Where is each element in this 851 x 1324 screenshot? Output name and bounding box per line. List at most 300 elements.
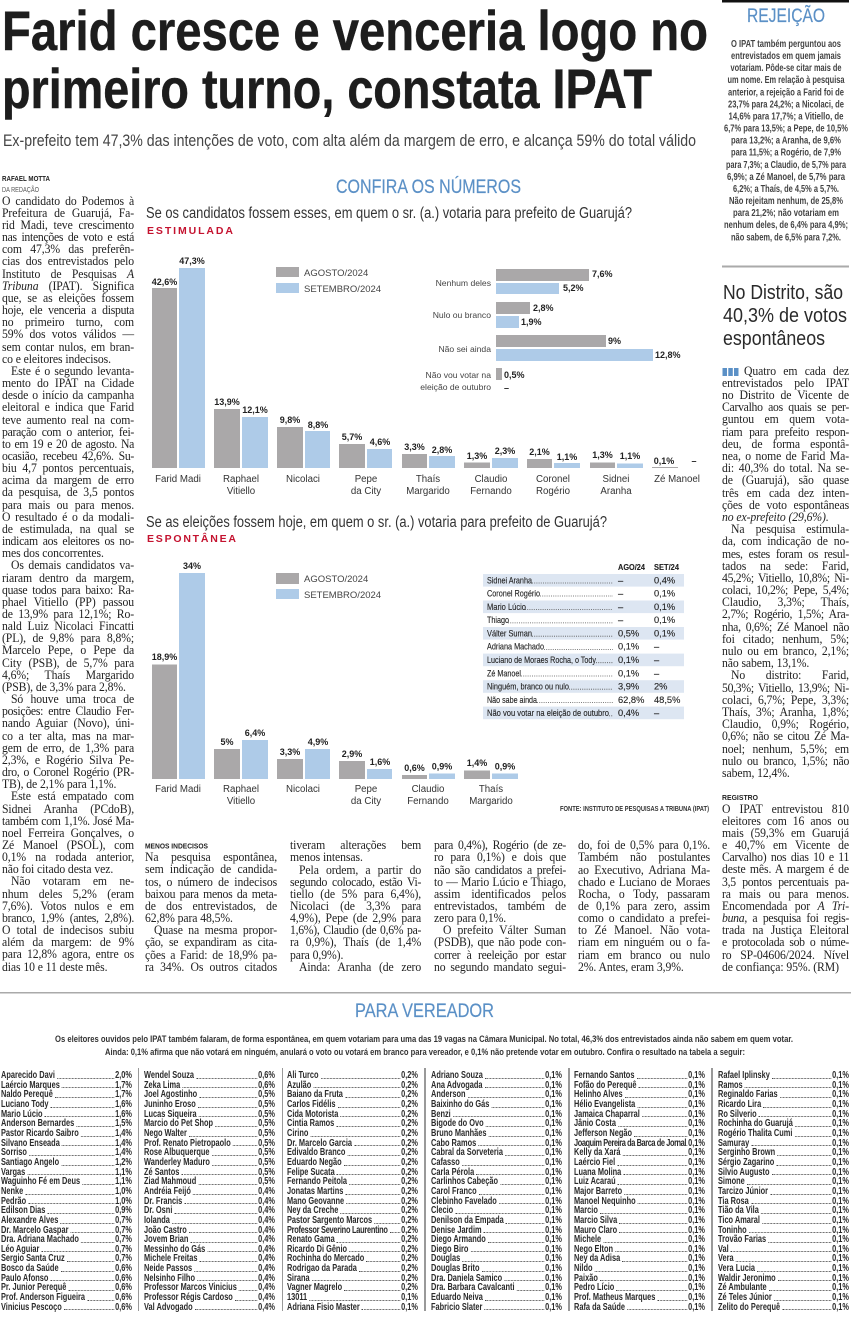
article: menos indecisos, column 1: ções a Farid: de 18,9% pa- [145, 948, 277, 962]
article: registro: de confiança: 95%. (RM) [722, 960, 839, 974]
list: vereadores, column 2: Marcio do Pet Shop [144, 1118, 213, 1129]
list: vereadores, column 3: Cida Motorista [287, 1109, 338, 1120]
question: espontânea: ESPONTÂNEA [147, 532, 236, 545]
table: outros citados: 2% [654, 682, 667, 692]
legend: espontânea [276, 573, 381, 601]
list: vereadores, column 1: 0,7% [115, 1253, 132, 1264]
table: outros citados: 0,1% [654, 589, 675, 599]
list: vereadores, column 3: 0,2% [401, 1089, 418, 1100]
list: vereadores, column 1: Alexandre Alves [1, 1215, 58, 1226]
list: vereadores, column 2: Prof. Renato Pietropaolo [144, 1138, 231, 1149]
article: menos indecisos, column 3: correr à reeleição por estar [434, 948, 566, 962]
icon: blue bars [722, 368, 738, 376]
table: outros citados: – [654, 655, 660, 665]
bar chart: nenhum, nulo, não sei: 7,6% [592, 269, 613, 279]
headline: primeiro turno, constata IPAT [2, 57, 652, 120]
list: vereadores, column 3: 0,2% [401, 1224, 418, 1236]
article: registro: Carvalho) nos dias 10 e 11 [722, 850, 849, 864]
list: vereadores, column 5: Prof. Matheus Marques [574, 1292, 655, 1303]
article: menos indecisos, column 3: O prefeito Válter Suman [443, 923, 566, 937]
article: menos indecisos, column 4: do, foi de 0,5% para 0,1%. [578, 838, 710, 852]
bar chart: nenhum, nulo, não sei: 9% [608, 336, 621, 346]
list: vereadores, column 4: 0,1% [545, 1234, 562, 1245]
bar chart: nenhum, nulo, não sei: 0,5% [504, 370, 525, 380]
bar chart: espontânea: Raphael [223, 784, 259, 795]
list: vereadores, column 5: 0,1% [688, 1234, 705, 1245]
list: vereadores, column 6: Vera Lucia [718, 1263, 755, 1274]
list: vereadores, column 2: Ziad Mahmoud [144, 1176, 196, 1187]
article: registro: deste mês. A margem é de [722, 862, 849, 876]
table: outros citados: – [618, 602, 624, 612]
list: vereadores, column 3: 0,2% [401, 1186, 418, 1197]
bar chart: estimulada: Vitiello [227, 486, 255, 497]
article: main text column: hoje, ele venceria a disputa [2, 303, 134, 317]
list: vereadores, column 6: Rogério Thalita Cumi [718, 1128, 792, 1139]
list: vereadores, column 4: Cafasso [431, 1157, 460, 1168]
article: menos indecisos, column 4: riam em branco ou nulo [578, 948, 710, 962]
list: vereadores, column 6: Samuray [718, 1138, 749, 1149]
list: vereadores, column 6: 0,1% [832, 1292, 849, 1303]
article: menos indecisos, column 2: segundo colocado, estão Vi- [290, 875, 421, 889]
article: main text column: 4,6%; Thaís Margarido [2, 668, 134, 682]
list: vereadores, column 4: Denilson da Empada [431, 1215, 504, 1226]
article: menos indecisos, column 3: não são candidatos a prefei- [434, 862, 566, 876]
list: vereadores, column 3: Ney da Creche [287, 1205, 338, 1216]
list: vereadores, column 2: 0,4% [258, 1302, 275, 1313]
list: vereadores, column 6: Toninho [718, 1224, 747, 1236]
list: vereadores, column 5: 0,1% [688, 1138, 705, 1149]
list: vereadores, column 2: Val Advogado [144, 1302, 193, 1313]
list: vereadores, column 1: Pedrão [1, 1196, 26, 1207]
list: vereadores, column 5: Luiz Acaraú [574, 1176, 616, 1187]
list: vereadores, column 5: Helinho Alves [574, 1089, 623, 1100]
list: vereadores, column 6: Simone [718, 1176, 745, 1187]
list: vereadores, column 5: 0,1% [688, 1215, 705, 1226]
bar chart: estimulada: Rogério [536, 486, 570, 497]
article: registro: e 40,7% em Vicente de [722, 838, 849, 852]
list: vereadores, column 5: 0,1% [688, 1253, 705, 1264]
article: menos indecisos, column 3: to — Mario Lúcio e Thiago, [434, 875, 566, 889]
list: vereadores, column 1: 1,1% [115, 1176, 132, 1187]
list: vereadores, column 5: Ney da Adisa [574, 1253, 620, 1264]
list: vereadores, column 5: Marcio Silva [574, 1215, 617, 1226]
article: registro: 3,5 pontos percentuais pa- [722, 875, 849, 889]
list: vereadores, column 1: 1,1% [115, 1167, 132, 1178]
article: main text column: desde o início da campanha [2, 388, 134, 402]
article: main text column: Só houve uma troca de [11, 692, 134, 706]
list: vereadores, column 2: 0,5% [258, 1089, 275, 1100]
article: main text column: (PSB), de 3,3% para 2,8%. [2, 680, 126, 694]
list: vereadores, column 3: 0,2% [401, 1118, 418, 1129]
list: vereadores, column 6: Rafael Iplinsky [718, 1070, 770, 1081]
list: vereadores, column 5: Nego Elton [574, 1244, 613, 1255]
list: vereadores, column 4: 0,1% [545, 1128, 562, 1139]
bar chart: espontânea: 0,9% [495, 762, 515, 772]
article: distrito text column: no Distrito de Vicente de [722, 388, 849, 402]
list: vereadores, column 1: Prof. Anderson Figueira [1, 1292, 85, 1303]
list: vereadores, column 4: 0,1% [545, 1215, 562, 1226]
list: vereadores, column 6: Tarcizo Júnior [718, 1186, 768, 1197]
bar chart: espontânea: Pepe [355, 784, 377, 795]
list: vereadores, column 3 [287, 1070, 418, 1313]
list: vereadores, column 1: 0,7% [115, 1224, 132, 1236]
list: vereadores, column 2: Wendel Souza [144, 1070, 194, 1081]
source note: FONTE: INSTITUTO DE PESQUISAS A TRIBUNA (IPAT) [560, 806, 709, 813]
list: vereadores, column 6: 0,1% [832, 1128, 849, 1139]
list: vereadores, column 1: 0,6% [115, 1273, 132, 1284]
article: menos indecisos, column 2: tiello (de 5% para 6,4%), [290, 887, 421, 901]
article: main text column: quase todos para baixo: Ra- [2, 583, 134, 597]
list: vereadores, column 1: 0,6% [115, 1302, 132, 1313]
bar chart: estimulada: Pepe [355, 474, 377, 485]
list: vereadores, column 3: Baiano da Fruta [287, 1089, 343, 1100]
article: menos indecisos, column 4: ao Executivo, Adriana Ma- [578, 862, 710, 876]
bar chart: estimulada: 47,3% [179, 256, 205, 266]
heading: confira os números: CONFIRA OS NÚMEROS [336, 175, 521, 198]
article: main text column: eleitoral e indica que Farid [2, 400, 134, 414]
article: distrito text column [722, 364, 849, 780]
list: vereadores, column 6: 0,1% [832, 1157, 849, 1168]
list: vereadores, column 1: Léo Aguiar [1, 1244, 39, 1255]
label: registro: REGISTRO [722, 793, 758, 802]
bar chart: estimulada: 12,1% [242, 405, 268, 415]
article: menos indecisos, column 3: ro para 0,1%) e dois que [434, 850, 566, 864]
table: outros citados: Não vou votar na eleição de outubro [487, 708, 609, 718]
bar chart: estimulada: Claudio [475, 474, 507, 485]
list: vereadores, column 5: Joaquim Pereira da Barca de Jornal [574, 1138, 686, 1149]
list: vereadores, column 3: Adriana Fisio Master [287, 1302, 360, 1313]
list: vereadores, column 1: 1,5% [115, 1118, 132, 1129]
list: vereadores, column 1: 1,2% [115, 1157, 132, 1168]
list: vereadores, column 5: Manoel Nequinho [574, 1196, 636, 1207]
list: vereadores, column 3: 0,2% [401, 1070, 418, 1081]
list: vereadores, column 1: 1,6% [115, 1099, 132, 1110]
bar chart: espontânea: Farid Madi [155, 784, 201, 795]
list: vereadores, column 2: 0,4% [258, 1253, 275, 1264]
bar chart: espontânea: Fernando [407, 796, 449, 807]
list: vereadores, column 3: Fernando Peitola [287, 1176, 347, 1187]
list: vereadores, column 5: 0,1% [688, 1147, 705, 1158]
list: vereadores, column 6: 0,1% [832, 1273, 849, 1284]
article: registro: e protocolada sob o núme- [722, 935, 849, 949]
list: vereadores, column 4: Benzi [431, 1109, 451, 1120]
list: vereadores, column 4: Douglas [431, 1253, 460, 1264]
list: vereadores, column 3: 0,2% [401, 1080, 418, 1091]
bar chart: espontânea: Thaís [479, 784, 503, 795]
table: outros citados: 0,4% [654, 575, 675, 585]
list: vereadores, column 2: 0,4% [258, 1263, 275, 1274]
bar chart: espontânea: 0,6% [404, 763, 425, 773]
list: vereadores, column 6: 0,1% [832, 1253, 849, 1264]
bar chart: estimulada: 1,1% [557, 452, 577, 462]
list: vereadores, column 1: Silvano Enseada [1, 1138, 60, 1149]
byline: RAFAEL MOTTA [2, 174, 50, 183]
article: distrito text column: foi citado; nenhum, 5%; [722, 632, 849, 646]
list: vereadores, column 3: 0,2% [401, 1253, 418, 1264]
bar chart: estimulada: 42,6% [152, 277, 177, 287]
bar chart: espontânea [152, 561, 518, 807]
article: main text column: co a ter alta, mas na mar- [2, 729, 134, 743]
list: vereadores, column 1: Santiago Angelo [1, 1157, 59, 1168]
list: vereadores, column 3: Eduardo Negão [287, 1157, 342, 1168]
bar chart: estimulada: – [691, 456, 697, 466]
list: vereadores, column 2: Iolanda [144, 1215, 170, 1226]
list: vereadores, column 1: 1,6% [115, 1109, 132, 1120]
article: menos indecisos, column 4: chado e Luciano de Moraes [578, 875, 710, 889]
list: vereadores, column 6: Zelito do Perequê [718, 1302, 780, 1313]
list: vereadores, column 3: 0,2% [401, 1215, 418, 1226]
list: vereadores, column 1: 0,6% [115, 1282, 132, 1293]
article: distrito text column: ções de voto espontâneas [722, 498, 849, 512]
list: vereadores, column 5: Jânio Costa [574, 1118, 616, 1129]
bar chart: nenhum, nulo, não sei: 1,9% [521, 317, 542, 327]
table: outros citados: AGO/24 [618, 562, 645, 572]
list: vereadores, column 5: 0,1% [688, 1282, 705, 1293]
bar chart: nenhum, nulo, não sei: – [504, 383, 509, 393]
list: vereadores, column 6: 0,1% [832, 1302, 849, 1313]
bar chart: estimulada: 1,3% [467, 451, 487, 461]
list: vereadores, column 1: Aparecido Davi [1, 1070, 55, 1081]
list: vereadores, column 5: Fofão do Perequê [574, 1080, 636, 1091]
list: vereadores, column 5: Jamaica Chaparral [574, 1109, 640, 1120]
article: distrito text column: não sabem, 13,1%. [722, 656, 809, 670]
list: vereadores, column 2: Rose Albuquerque [144, 1147, 210, 1158]
list: vereadores, column 4: Diego Biro [431, 1244, 468, 1255]
list: vereadores, column 6: Vera [718, 1253, 734, 1264]
list: vereadores, column 3: 0,2% [401, 1147, 418, 1158]
article: menos indecisos, column 1: ra 34%. Os outros citados [145, 960, 277, 974]
list: vereadores, column 1 [1, 1070, 132, 1313]
bar chart: espontânea: Vitiello [227, 796, 255, 807]
article: main text column: TB), de 2,1% para 1,1%. [2, 777, 116, 791]
list: vereadores, column 4: Eduardo Neiva [431, 1292, 483, 1303]
table: outros citados: 48,5% [654, 695, 680, 705]
article: menos indecisos, column 3: zero para 0,1%. [434, 911, 506, 925]
list: vereadores, column 1: Dra. Adriana Machado [1, 1234, 79, 1245]
article: main text column: gem de erro, de 1,3% para [2, 741, 134, 755]
article: registro: buna, a pesquisa foi regis- [722, 911, 849, 925]
list: vereadores, column 6: Silvio Augusto [718, 1167, 770, 1178]
article: main text column: O resultado é o da modali- [2, 510, 134, 524]
article: main text column: cias dos entrevistados pelo [2, 254, 134, 268]
list: vereadores, column 6: Serginho Brown [718, 1147, 775, 1158]
list: vereadores, column 1: Sergio Santa Cruz [1, 1253, 65, 1264]
article: menos indecisos, column 3 [434, 838, 566, 974]
table: outros citados: – [618, 615, 624, 625]
article: distrito text column: riam para prefeito respon- [722, 425, 849, 439]
article: main text column: mento do IPAT na Cidade [2, 376, 134, 390]
article: main text column: to em 19 e 20 de agosto. Na [2, 437, 134, 451]
list: vereadores, column 1: Bosco da Saúde [1, 1263, 59, 1274]
list: vereadores, column 6: Ricardo Lira [718, 1099, 761, 1110]
list: vereadores, column 6: 0,1% [832, 1176, 849, 1187]
list: vereadores, column 2: Andréia Feijó [144, 1186, 191, 1197]
bar chart: espontânea: 0,9% [432, 762, 452, 772]
list: vereadores, column 1: 1,0% [115, 1186, 132, 1197]
article: main text column: no primeiro turno, com [2, 315, 134, 329]
list: vereadores, column 2: 0,4% [258, 1244, 275, 1255]
list: vereadores, column 3: 0,2% [401, 1234, 418, 1245]
article: menos indecisos, column 4: Rocha, o Tody, passaram [578, 887, 710, 901]
list: vereadores, column 4: Clecio [431, 1205, 453, 1216]
list: vereadores, column 2: 0,4% [258, 1215, 275, 1226]
article: main text column: dias 10 e 11 deste mês. [2, 960, 107, 974]
article: distrito text column: No distrito: Farid, [731, 668, 849, 682]
question: espontânea: Se as eleições fossem hoje, em quem o sr. (a.) votaria para prefeito de Guarujá? [146, 514, 607, 531]
list: vereadores, column 6: 0,1% [832, 1224, 849, 1236]
list: vereadores, column 4: Baixinho do Gás [431, 1099, 489, 1110]
list: vereadores, column 2: 0,4% [258, 1292, 275, 1303]
list: vereadores, column 4: Douglas Brito [431, 1263, 480, 1274]
bar chart: espontânea: 6,4% [245, 728, 265, 738]
article: distrito text column: 2,7%; Rogério, 1,5%; Ara- [722, 607, 849, 621]
article: main text column: co e eleitores indecisos. [2, 352, 111, 366]
list: vereadores, column 1: Luciano Tody [1, 1099, 49, 1110]
list: vereadores, column 2: 0,4% [258, 1234, 275, 1245]
list: vereadores, column 6: Waldir Jeronimo [718, 1273, 776, 1284]
article: menos indecisos, column 2: Pela ordem, a partir do [299, 862, 421, 876]
bar chart: estimulada: 4,6% [370, 437, 390, 447]
article: main text column: ocasião, recebeu 42,6%. Su- [2, 449, 134, 463]
list: vereadores, column 3: Jonatas Martins [287, 1186, 343, 1197]
article: menos indecisos, column 3: entrevistados, também de [434, 899, 566, 913]
list: vereadores, column 1: Anderson Bernardes [1, 1118, 74, 1129]
list: vereadores, column 6: Tião da Vila [718, 1205, 759, 1216]
bar chart: estimulada: 2,8% [432, 445, 452, 455]
list: vereadores, column 5: 0,1% [688, 1070, 705, 1081]
article: distrito text column: noel; nenhum, 5,5%; em [722, 742, 849, 756]
list: vereadores, column 1: 1,7% [115, 1089, 132, 1100]
list: vereadores, column 4: 0,1% [545, 1070, 562, 1081]
list: vereadores, column 5: Rafa da Saúde [574, 1302, 625, 1313]
list: vereadores, column 4: Carla Pérola [431, 1167, 474, 1178]
article: main text column: phael Vitiello (PP) passou [2, 595, 134, 609]
article: main text column: Zé Manoel (PSOL), com [2, 838, 134, 852]
list: vereadores, column 4: 0,1% [545, 1109, 562, 1120]
bar chart: estimulada: 13,9% [214, 397, 240, 407]
list: vereadores, column 4: Clebinho Favelado [431, 1196, 497, 1207]
list: vereadores, column 3: 0,1% [401, 1302, 418, 1313]
list: vereadores, column 4: Carlinhos Cabeção [431, 1176, 498, 1187]
list: vereadores, column 4: 0,1% [545, 1167, 562, 1178]
article: distrito text column: 50,3%; Vitiello, 13,9%; Ni- [722, 681, 849, 695]
list: vereadores, column 6: Ro Silverio [718, 1109, 757, 1120]
article: main text column: de estimulada, na qual se [2, 522, 134, 536]
article: menos indecisos, column 4: to Zé Manoel. Não vota- [578, 923, 710, 937]
legend: estimulada [276, 267, 381, 295]
list: vereadores, column 3: 0,2% [401, 1099, 418, 1110]
article: distrito text column: de (Guarujá), são quase [722, 473, 849, 487]
list: vereadores, column 4: Denise Jardim [431, 1224, 482, 1236]
table: outros citados: 0,1% [654, 602, 675, 612]
list: vereadores, column 4 [431, 1070, 562, 1313]
list: vereadores, column 5: Michele [574, 1234, 601, 1245]
list: vereadores, column 1: 0,7% [115, 1234, 132, 1245]
article: distrito text column: Quatro em cada dez [744, 364, 849, 378]
list: vereadores, column 4: Bigode do Ovo [431, 1118, 484, 1129]
list: vereadores, column 1: 1,7% [115, 1080, 132, 1091]
bar chart: estimulada: da City [351, 486, 381, 497]
table: outros citados [483, 562, 684, 719]
list: vereadores, column 3: Edivaldo Branco [287, 1147, 345, 1158]
list: vereadores, column 5: Marcio [574, 1205, 598, 1216]
list: vereadores, column 3: 0,2% [401, 1138, 418, 1149]
list: vereadores, column 2: 0,4% [258, 1205, 275, 1216]
article: main text column: mes dos concorrentes. [2, 546, 104, 560]
list: vereadores, column 4: 0,1% [545, 1118, 562, 1129]
article: main text column: nando Aguiar (Novo), úni- [2, 716, 134, 730]
list: vereadores, column 3: 0,2% [401, 1263, 418, 1274]
article: menos indecisos, column 2: tiveram alterações bem [290, 838, 421, 852]
bar chart: estimulada: Margarido [406, 486, 450, 497]
article: menos indecisos, column 4 [578, 838, 710, 974]
article: menos indecisos, column 1: Quase na mesma propor- [154, 923, 277, 937]
list: vereadores, column 4: 0,1% [545, 1089, 562, 1100]
list: vereadores, column 6: 0,1% [832, 1138, 849, 1149]
article: distrito text column: 0,6%; não se citou Zé Ma- [722, 729, 849, 743]
list: vereadores, column 2: Nego Walter [144, 1128, 187, 1139]
list: vereadores, column 3: 0,2% [401, 1244, 418, 1255]
list: vereadores, column 4: Bruno Manhães [431, 1128, 487, 1139]
article: distrito text column: guntou em quem vota- [722, 412, 849, 426]
article: registro: eleitores com 16 anos ou [722, 814, 849, 828]
bar chart: espontânea: 34% [183, 561, 201, 571]
list: vereadores, column 1: 0,9% [115, 1205, 132, 1216]
table: outros citados: Adriana Machado [487, 642, 544, 652]
article: registro: mais (59,3% em Guarujá [722, 826, 849, 840]
list: vereadores, column 5: Major Barreto [574, 1186, 622, 1197]
list: vereadores, column 6: 0,1% [832, 1109, 849, 1120]
list: vereadores, column 4: 0,1% [545, 1138, 562, 1149]
question: estimulada [146, 205, 632, 237]
table: outros citados: – [618, 575, 624, 585]
list: vereadores, column 2: 0,5% [258, 1118, 275, 1129]
bar chart: estimulada: Thaís [416, 474, 440, 485]
list: vereadores, column 6: 0,1% [832, 1282, 849, 1293]
list: vereadores, column 6: 0,1% [832, 1244, 849, 1255]
bar chart: estimulada: Zé Manoel [654, 474, 700, 485]
list: vereadores, column 3: Renato Gama [287, 1234, 335, 1245]
list: vereadores, column 5: 0,1% [688, 1176, 705, 1187]
article: distrito text column: sabem, 12,4%. [722, 766, 790, 780]
bar chart: estimulada: 5,7% [342, 432, 362, 442]
article: menos indecisos, column 3: assim identificados pelos [434, 887, 566, 901]
question: espontânea [146, 514, 607, 545]
article: menos indecisos, column 2: Nicolaci (de 3,3% para [290, 899, 421, 913]
list: vereadores, column 4: Anderson [431, 1089, 466, 1100]
list: vereadores, column 4: 0,1% [545, 1099, 562, 1110]
list: vereadores, column 6: Tico Amaral [718, 1215, 760, 1226]
article: menos indecisos, column 1: sem indicação de candida- [145, 862, 277, 876]
bar chart: estimulada: Raphael [223, 474, 259, 485]
article: distrito text column: mes, estes foram os resul- [722, 546, 849, 560]
article: distrito text column: entrevistados pelo IPAT [722, 376, 849, 390]
article: main text column: nald Luiz Nicolaci Fincatti [2, 619, 134, 633]
article: main text column: paração com o anterior, fei- [2, 425, 134, 439]
list: vereadores, column 6: 0,1% [832, 1186, 849, 1197]
list: vereadores, column 4: Carol Franco [431, 1186, 477, 1197]
article: distrito text column: colaci, 6,7%; Pepe, 3,3%; [722, 693, 849, 707]
article: main text column: 59% dos votos válidos — [2, 327, 134, 341]
bar chart: nenhum, nulo, não sei: 5,2% [563, 283, 584, 293]
list: vereadores, column 2: Michele Freitas [144, 1253, 197, 1264]
article: menos indecisos, column 4: riam em ninguém ou o fa- [578, 935, 710, 949]
list: vereadores, column 3: 0,1% [401, 1292, 418, 1303]
list: vereadores, column 1: Sorriso [1, 1147, 27, 1158]
list: vereadores, column 4: 0,1% [545, 1080, 562, 1091]
bar chart: nenhum, nulo, não sei: 2,8% [533, 303, 554, 313]
list: vereadores, column 3: Cintia Ramos [287, 1118, 334, 1129]
